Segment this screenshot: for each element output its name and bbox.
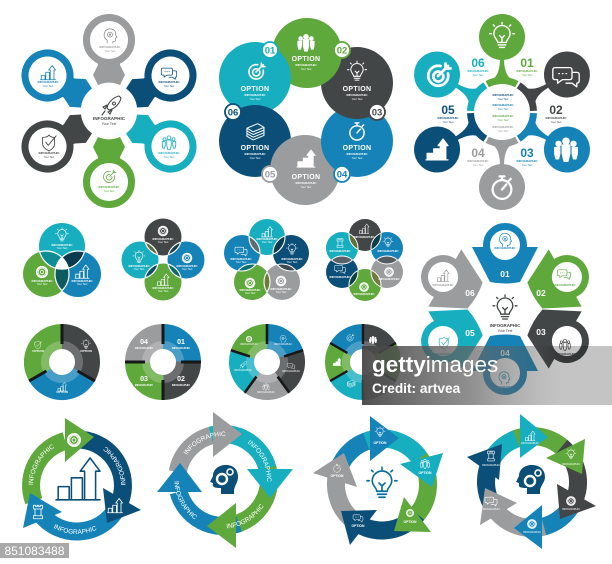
arrow icons: INFOGRAPHIC — [482, 507, 500, 511]
venn labels and icons: Your Text — [37, 282, 48, 286]
clover labels and icons: Your Text — [262, 240, 273, 244]
spoke: navy — [406, 106, 489, 181]
diagram: six rings around rocket hub — [17, 18, 201, 204]
numbered labels: Your Text — [473, 163, 484, 167]
tab 04 navy-blue: 04 — [500, 348, 510, 358]
ring: navy: Your Text — [164, 84, 175, 88]
diagram: three circle venn — [23, 223, 101, 297]
arrow labels: OPTION — [418, 471, 432, 475]
center list: INFOGRAPHIC — [492, 125, 514, 129]
ring: teal: Your Text — [164, 155, 175, 159]
circle icons — [426, 22, 579, 199]
venn labels and icons — [32, 228, 93, 286]
watermark wordmark: gettyimages — [372, 352, 498, 377]
option: green: Your Text — [301, 67, 312, 71]
clover labels and icons: INFOGRAPHIC — [176, 264, 198, 268]
arc labels: INFOGRAPHIC — [174, 482, 197, 519]
tab 04 navy-blue — [472, 334, 538, 392]
tab 02 green — [517, 239, 599, 325]
venn labels and icons: Your Text — [57, 246, 68, 250]
clover labels and icons: INFOGRAPHIC — [152, 286, 174, 290]
option: blue: Your Text — [352, 156, 363, 160]
center icon: bulb — [367, 467, 397, 497]
segment labels: OPTION — [80, 349, 92, 353]
clover labels and icons: Your Text — [276, 290, 287, 294]
donut: five segments — [231, 324, 303, 398]
clover labels and icons — [128, 226, 198, 293]
numbered labels: Your Text — [522, 163, 533, 167]
numbered labels — [438, 56, 567, 167]
option: dark — [343, 61, 371, 101]
option: navy: INFOGRAPHIC — [244, 152, 266, 156]
option: blue: OPTION — [343, 145, 371, 152]
arrow icons: INFOGRAPHIC — [562, 462, 580, 466]
arrow labels: OPTION — [374, 441, 387, 445]
numbered labels: Your Text — [473, 73, 484, 77]
venn labels and icons: INFOGRAPHIC — [32, 279, 53, 283]
ring: dark — [17, 105, 98, 177]
segment numbers: 02 — [177, 376, 185, 383]
venn labels and icons: INFOGRAPHIC — [52, 243, 73, 247]
option: gray: INFOGRAPHIC — [296, 181, 317, 185]
numbered labels: Your Text — [522, 73, 533, 77]
option: gray: OPTION — [292, 174, 320, 181]
arrow icons — [34, 434, 122, 519]
option: gray — [292, 150, 320, 189]
spoke: teal — [406, 43, 489, 118]
option: gray: Your Text — [301, 185, 312, 189]
number badges: 05 — [265, 170, 276, 180]
hub: rocket: Your Text — [102, 122, 116, 126]
clover labels and icons: Your Text — [134, 267, 145, 271]
watermark credit: Credit: artvea — [372, 381, 461, 396]
spoke: dark — [515, 43, 598, 118]
spoke: green — [479, 14, 525, 84]
clover labels and icons: INFOGRAPHIC — [270, 287, 292, 291]
clover labels and icons: Your Text — [245, 291, 256, 295]
clover labels and icons — [230, 226, 303, 295]
tab 06 gray: INFOGRAPHIC — [432, 283, 454, 287]
tab 03 dark: 03 — [536, 327, 546, 337]
tab 02 green: 02 — [536, 288, 546, 298]
diagram: six circle clover — [326, 219, 403, 301]
center list: INFOGRAPHIC — [492, 93, 514, 97]
tab 02 green: INFOGRAPHIC — [554, 283, 576, 287]
segment numbers: INFOGRAPHIC — [172, 383, 190, 387]
segment labels: INFOGRAPHIC — [282, 369, 300, 373]
clover labels and icons: Your Text — [158, 240, 169, 244]
segment labels: INFOGRAPHIC — [240, 342, 258, 346]
tab 06 gray: 06 — [465, 288, 475, 298]
ring: blue — [17, 45, 98, 117]
tab 05 teal: 05 — [465, 328, 475, 338]
clover labels and icons — [330, 224, 400, 296]
asset id tag: 851083488 — [4, 544, 65, 558]
arrow labels: OPTION — [404, 520, 417, 524]
ring: green: Your Text — [104, 189, 115, 193]
hub: rocket — [93, 96, 126, 126]
circle stack back to front — [219, 18, 393, 205]
donut: three segments — [27, 324, 97, 397]
ring: teal — [120, 105, 201, 177]
arrow labels — [330, 427, 432, 528]
clover labels and icons: Your Text — [236, 260, 247, 264]
tab 05 teal: INFOGRAPHIC — [434, 352, 455, 356]
option: navy — [241, 124, 269, 160]
tab 01 blue: 01 — [500, 269, 510, 279]
numbered labels: 06 — [471, 56, 485, 70]
ring: blue: INFOGRAPHIC — [38, 80, 59, 84]
tab 01 blue — [472, 226, 538, 284]
option: teal — [241, 63, 269, 101]
option: teal: Your Text — [250, 97, 261, 101]
tab 03 dark — [517, 293, 599, 379]
ring: gray: Your Text — [105, 49, 116, 53]
ring: navy — [120, 45, 201, 117]
center list: Your Text — [498, 118, 509, 122]
segment labels: INFOGRAPHIC — [234, 368, 252, 372]
arc labels — [28, 444, 126, 534]
arrow icons: INFOGRAPHIC — [521, 441, 539, 445]
option: navy: Your Text — [250, 156, 261, 160]
numbered labels: INFOGRAPHIC — [468, 69, 489, 73]
circular arrows: five with bulb — [313, 416, 443, 545]
numbered labels: Your Text — [443, 120, 454, 124]
hub: bulb: INFOGRAPHIC — [490, 323, 521, 328]
ring: navy: INFOGRAPHIC — [158, 80, 180, 84]
numbered labels: INFOGRAPHIC — [438, 116, 459, 120]
numbered labels: INFOGRAPHIC — [516, 69, 538, 73]
option: blue: INFOGRAPHIC — [346, 152, 368, 156]
arc labels: INFOGRAPHIC — [226, 504, 264, 528]
segment labels — [32, 339, 92, 394]
tab 04 navy-blue: INFOGRAPHIC — [494, 385, 515, 389]
donut: four segments — [125, 324, 201, 400]
ring: dark: INFOGRAPHIC — [38, 151, 60, 155]
option: dark: Your Text — [352, 97, 363, 101]
numbered labels: Your Text — [551, 120, 562, 124]
center icon: head with gears — [516, 465, 545, 494]
arrow icons: INFOGRAPHIC — [562, 507, 580, 511]
ring: teal: INFOGRAPHIC — [158, 151, 180, 155]
segment labels — [234, 335, 300, 394]
ring: blue: Your Text — [43, 84, 54, 88]
option: green — [292, 34, 320, 71]
ring: dark: Your Text — [44, 155, 55, 159]
segment numbers: 03 — [140, 376, 148, 383]
clover labels and icons: INFOGRAPHIC — [128, 264, 150, 268]
arrow icons: INFOGRAPHIC — [482, 463, 500, 467]
clover labels and icons: INFOGRAPHIC — [354, 235, 375, 239]
clover labels and icons: INFOGRAPHIC — [256, 237, 278, 241]
numbered labels: INFOGRAPHIC — [516, 159, 538, 163]
circular arrows: four with head icon — [157, 412, 293, 548]
clover labels and icons: INFOGRAPHIC — [330, 275, 351, 279]
segment labels: OPTION — [56, 390, 68, 394]
clover labels and icons: INFOGRAPHIC — [330, 249, 351, 253]
option: green: INFOGRAPHIC — [296, 63, 317, 67]
watermark band — [362, 346, 612, 405]
donut: six segments — [328, 324, 398, 400]
number badges: 02 — [337, 46, 347, 56]
center list — [492, 93, 514, 133]
segment labels: OPTION — [32, 349, 44, 353]
ring: gray: INFOGRAPHIC — [100, 45, 121, 49]
circular arrows: six with head icon — [467, 414, 596, 549]
option: blue — [343, 123, 371, 160]
arc labels: INFOGRAPHIC — [248, 440, 272, 482]
number badges: 01 — [265, 46, 276, 56]
clover labels and icons: INFOGRAPHIC — [282, 257, 303, 261]
tab 05 teal — [411, 293, 493, 379]
ring: green — [86, 137, 132, 204]
segment labels: INFOGRAPHIC — [257, 390, 275, 394]
segment numbers: 04 — [140, 339, 148, 346]
tab 03 dark: INFOGRAPHIC — [554, 352, 576, 356]
clover labels and icons: INFOGRAPHIC — [230, 257, 252, 261]
hub: bulb — [490, 295, 521, 333]
clover labels and icons: Your Text — [158, 289, 169, 293]
spoke: gray — [479, 140, 525, 210]
numbered labels: 03 — [520, 146, 534, 160]
arc labels: INFOGRAPHIC — [104, 447, 126, 485]
ring: green: INFOGRAPHIC — [98, 185, 120, 189]
ring: gray — [86, 18, 132, 85]
numbered labels: INFOGRAPHIC — [468, 159, 489, 163]
center list: Your Text — [498, 97, 509, 101]
hub: rocket: INFOGRAPHIC — [93, 116, 126, 121]
numbered labels: 02 — [549, 103, 563, 117]
circular arrows: three — [22, 418, 141, 540]
numbered labels: INFOGRAPHIC — [546, 116, 567, 120]
arrow labels: OPTION — [330, 474, 344, 478]
option: green: OPTION — [292, 56, 320, 63]
clover labels and icons: Your Text — [287, 260, 298, 264]
segment numbers: 01 — [177, 339, 185, 346]
numbered labels: 01 — [520, 56, 534, 70]
number badges: 03 — [372, 108, 382, 118]
clover labels and icons: INFOGRAPHIC — [378, 277, 400, 281]
segment labels — [333, 334, 377, 387]
arrow icons — [482, 431, 580, 534]
numbered labels: 04 — [471, 146, 485, 160]
arc labels: INFOGRAPHIC — [184, 432, 226, 455]
diagram: six arrow-shaped tabs around bulb — [411, 226, 599, 392]
center icon: head with gears — [210, 465, 238, 494]
clover labels and icons: INFOGRAPHIC — [354, 292, 375, 296]
number badges — [225, 42, 385, 182]
arc labels: INFOGRAPHIC — [28, 444, 54, 484]
segment numbers: INFOGRAPHIC — [135, 346, 153, 350]
hub: bulb: Your Text — [498, 329, 512, 333]
venn labels and icons: INFOGRAPHIC — [72, 279, 93, 283]
center list: INFOGRAPHIC — [492, 114, 514, 118]
center list: INFOGRAPHIC — [492, 103, 514, 107]
arrow labels: OPTION — [352, 524, 365, 528]
option: teal: OPTION — [241, 86, 269, 93]
segment numbers: INFOGRAPHIC — [135, 383, 153, 387]
clover labels and icons: INFOGRAPHIC — [240, 288, 261, 292]
diagram: five circle clover — [224, 219, 309, 300]
arrow icons: INFOGRAPHIC — [523, 530, 541, 534]
arc labels — [174, 432, 272, 528]
spoke: blue — [515, 106, 598, 181]
segment labels: INFOGRAPHIC — [274, 342, 292, 346]
venn labels and icons: Your Text — [77, 282, 88, 286]
diagram: six overlapping option circles — [219, 18, 393, 205]
diagram: four circle clover — [122, 218, 204, 300]
numbered labels: 05 — [441, 103, 455, 117]
diagram: six circles on stems around ring — [406, 14, 598, 210]
clover labels and icons: Your Text — [182, 267, 193, 271]
center icon: chart — [56, 458, 100, 500]
option: navy: OPTION — [241, 145, 269, 152]
center list: Your Text — [498, 107, 509, 111]
option: teal: INFOGRAPHIC — [244, 93, 266, 97]
tab 01 blue: INFOGRAPHIC — [494, 246, 516, 250]
arc labels: INFOGRAPHIC — [54, 524, 96, 534]
number badges: 06 — [228, 108, 238, 118]
center list: Your Text — [498, 129, 509, 133]
segment numbers: INFOGRAPHIC — [172, 346, 190, 350]
tab 06 gray — [411, 239, 493, 325]
option: dark: INFOGRAPHIC — [346, 93, 368, 97]
clover labels and icons: INFOGRAPHIC — [378, 249, 399, 253]
clover labels and icons: INFOGRAPHIC — [152, 237, 174, 241]
segment numbers — [135, 339, 190, 387]
option: dark: OPTION — [343, 86, 371, 93]
number badges: 04 — [337, 170, 348, 180]
